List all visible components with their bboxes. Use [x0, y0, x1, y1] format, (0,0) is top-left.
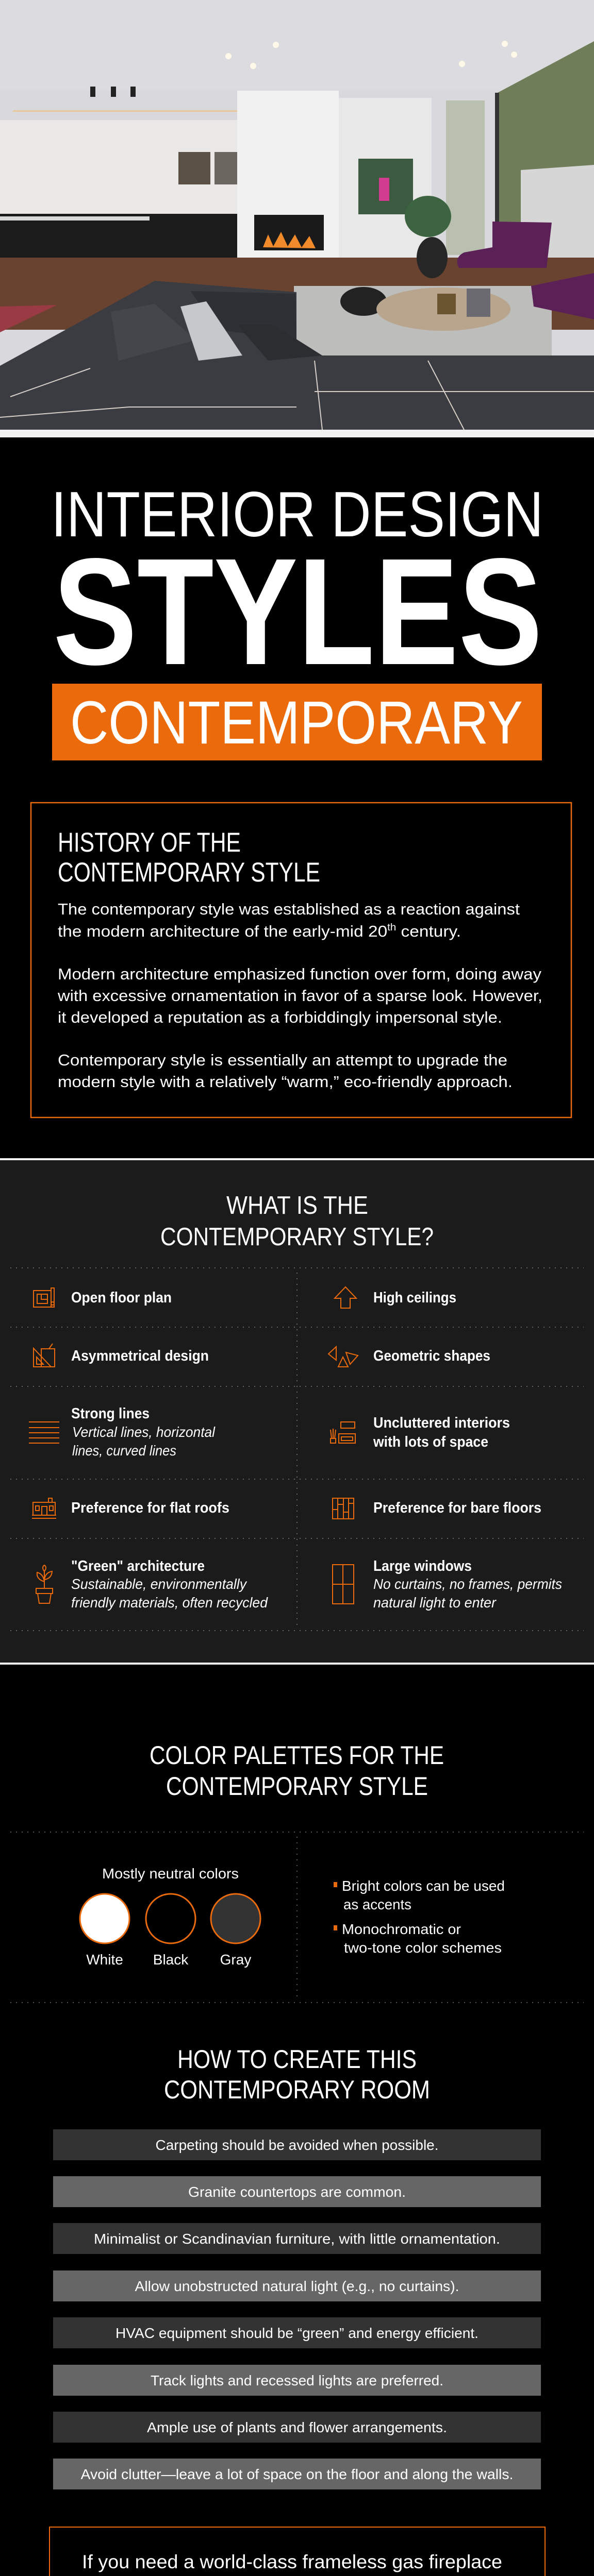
feature: bare floors: Preference for bare floors [373, 1500, 541, 1516]
icon: sofa and plant [331, 1422, 355, 1443]
panel: color palettes [10, 1741, 584, 2003]
title [51, 479, 543, 760]
history body text: Contemporary style is essentially an attempt to upgrade the [58, 1051, 507, 1069]
swatch labels [86, 1952, 251, 1968]
color swatches [80, 1894, 260, 1943]
hero photo: contemporary living room [0, 0, 594, 430]
swatch labels: White [86, 1952, 123, 1968]
feature: high ceilings: High ceilings [373, 1290, 456, 1306]
tip bars: Avoid clutter—leave a lot of space on the floor and along the walls. [80, 2466, 514, 2482]
accent bullets: as accents [343, 1896, 411, 1912]
feature: large windows: No curtains, no frames, permits [373, 1576, 562, 1592]
neutral colors label: Mostly neutral colors [102, 1866, 239, 1882]
icon: up arrow [335, 1287, 356, 1308]
callout: contact Ortal: If you need a world-class frameless gas fireplace [82, 2551, 502, 2572]
feature: large windows: natural light to enter [373, 1595, 497, 1611]
feature: strong lines: lines, curved lines [72, 1443, 176, 1459]
tip bars: Minimalist or Scandinavian furniture, with little ornamentation. [94, 2231, 500, 2247]
icon: horizontal lines [29, 1422, 59, 1443]
section heading: WHAT IS THE [226, 1192, 368, 1219]
feature: uncluttered interiors: with lots of space [373, 1434, 488, 1450]
palettes heading [150, 1741, 444, 1801]
history heading: HISTORY OF THE [58, 827, 241, 858]
feature: green architecture: Sustainable, environmentally [71, 1576, 248, 1592]
history body text: century. [396, 922, 461, 940]
feature: strong lines: Strong lines [71, 1405, 150, 1422]
icon: geometric shapes [328, 1347, 358, 1367]
tip bars: Ample use of plants and flower arrangements. [147, 2419, 447, 2435]
tip bars: HVAC equipment should be “green” and energy efficient. [116, 2325, 478, 2341]
feature: uncluttered interiors [373, 1415, 510, 1450]
accent bullets [334, 1878, 505, 1956]
history heading: CONTEMPORARY STYLE [58, 857, 320, 888]
palettes heading: COLOR PALETTES FOR THE [150, 1741, 444, 1770]
feature: green architecture [71, 1558, 268, 1611]
accent bullets: Bright colors can be used [342, 1878, 505, 1894]
section heading [160, 1192, 434, 1251]
palettes heading: CONTEMPORARY STYLE [166, 1772, 428, 1801]
feature: strong lines [71, 1405, 216, 1459]
feature: geometric shapes: Geometric shapes [373, 1348, 490, 1364]
how-to heading [164, 2045, 430, 2104]
tip bars: Granite countertops are common. [188, 2184, 406, 2200]
history body text: with excessive ornamentation in favor of a sparse look. However, [57, 987, 542, 1005]
how-to heading: CONTEMPORARY ROOM [164, 2075, 430, 2104]
feature: large windows [373, 1558, 562, 1611]
history body text: the modern architecture of the early-mid 20 [58, 922, 364, 940]
feature: strong lines: Vertical lines, horizontal [72, 1424, 216, 1440]
feature: large windows: Large windows [373, 1558, 472, 1574]
history body text: The contemporary style was established as a reaction against [58, 900, 520, 918]
orange banner: CONTEMPORARY [70, 689, 523, 757]
icon: potted plant [36, 1565, 53, 1603]
icon: large window [333, 1565, 354, 1604]
history heading [58, 827, 320, 888]
accent bullets: two-tone color schemes [344, 1940, 502, 1956]
history body text: Modern architecture emphasized function over form, doing away [58, 965, 542, 983]
tip bars: Allow unobstructed natural light (e.g., no curtains). [135, 2278, 459, 2294]
swatch labels: Gray [220, 1952, 251, 1968]
panel: history [31, 803, 571, 1117]
feature: open floor plan: Open floor plan [71, 1290, 172, 1306]
tip bars: Carpeting should be avoided when possible. [156, 2137, 438, 2153]
tip bars: Track lights and recessed lights are preferred. [151, 2372, 443, 2388]
feature: green architecture: "Green" architecture [71, 1558, 205, 1574]
how-to heading: HOW TO CREATE THIS [177, 2045, 417, 2074]
panel: what is the contemporary style [0, 1160, 594, 1663]
tip bars [53, 2129, 541, 2489]
history body text: it developed a reputation as a forbiddingly impersonal style. [58, 1008, 502, 1026]
feature: flat roofs: Preference for flat roofs [71, 1500, 229, 1516]
feature: asymmetrical design: Asymmetrical design [71, 1348, 209, 1364]
history body text: modern style with a relatively “warm,” eco-friendly approach. [58, 1073, 513, 1091]
feature: uncluttered interiors: Uncluttered interiors [373, 1415, 510, 1431]
callout: contact Ortal [50, 2527, 545, 2576]
history body text: th [387, 922, 396, 933]
panel: how to create this room [53, 2045, 541, 2489]
accent bullets: Monochromatic or [342, 1921, 461, 1937]
icon: flat roof house [32, 1498, 56, 1518]
icon: drafting triangle [34, 1344, 55, 1367]
swatch labels: Black [153, 1952, 189, 1968]
history body text [57, 900, 542, 1091]
section heading: CONTEMPORARY STYLE? [160, 1223, 434, 1251]
feature: green architecture: friendly materials, often recycled [71, 1595, 268, 1611]
icon: floor plan [34, 1288, 54, 1307]
icon: floor boards [333, 1498, 354, 1519]
